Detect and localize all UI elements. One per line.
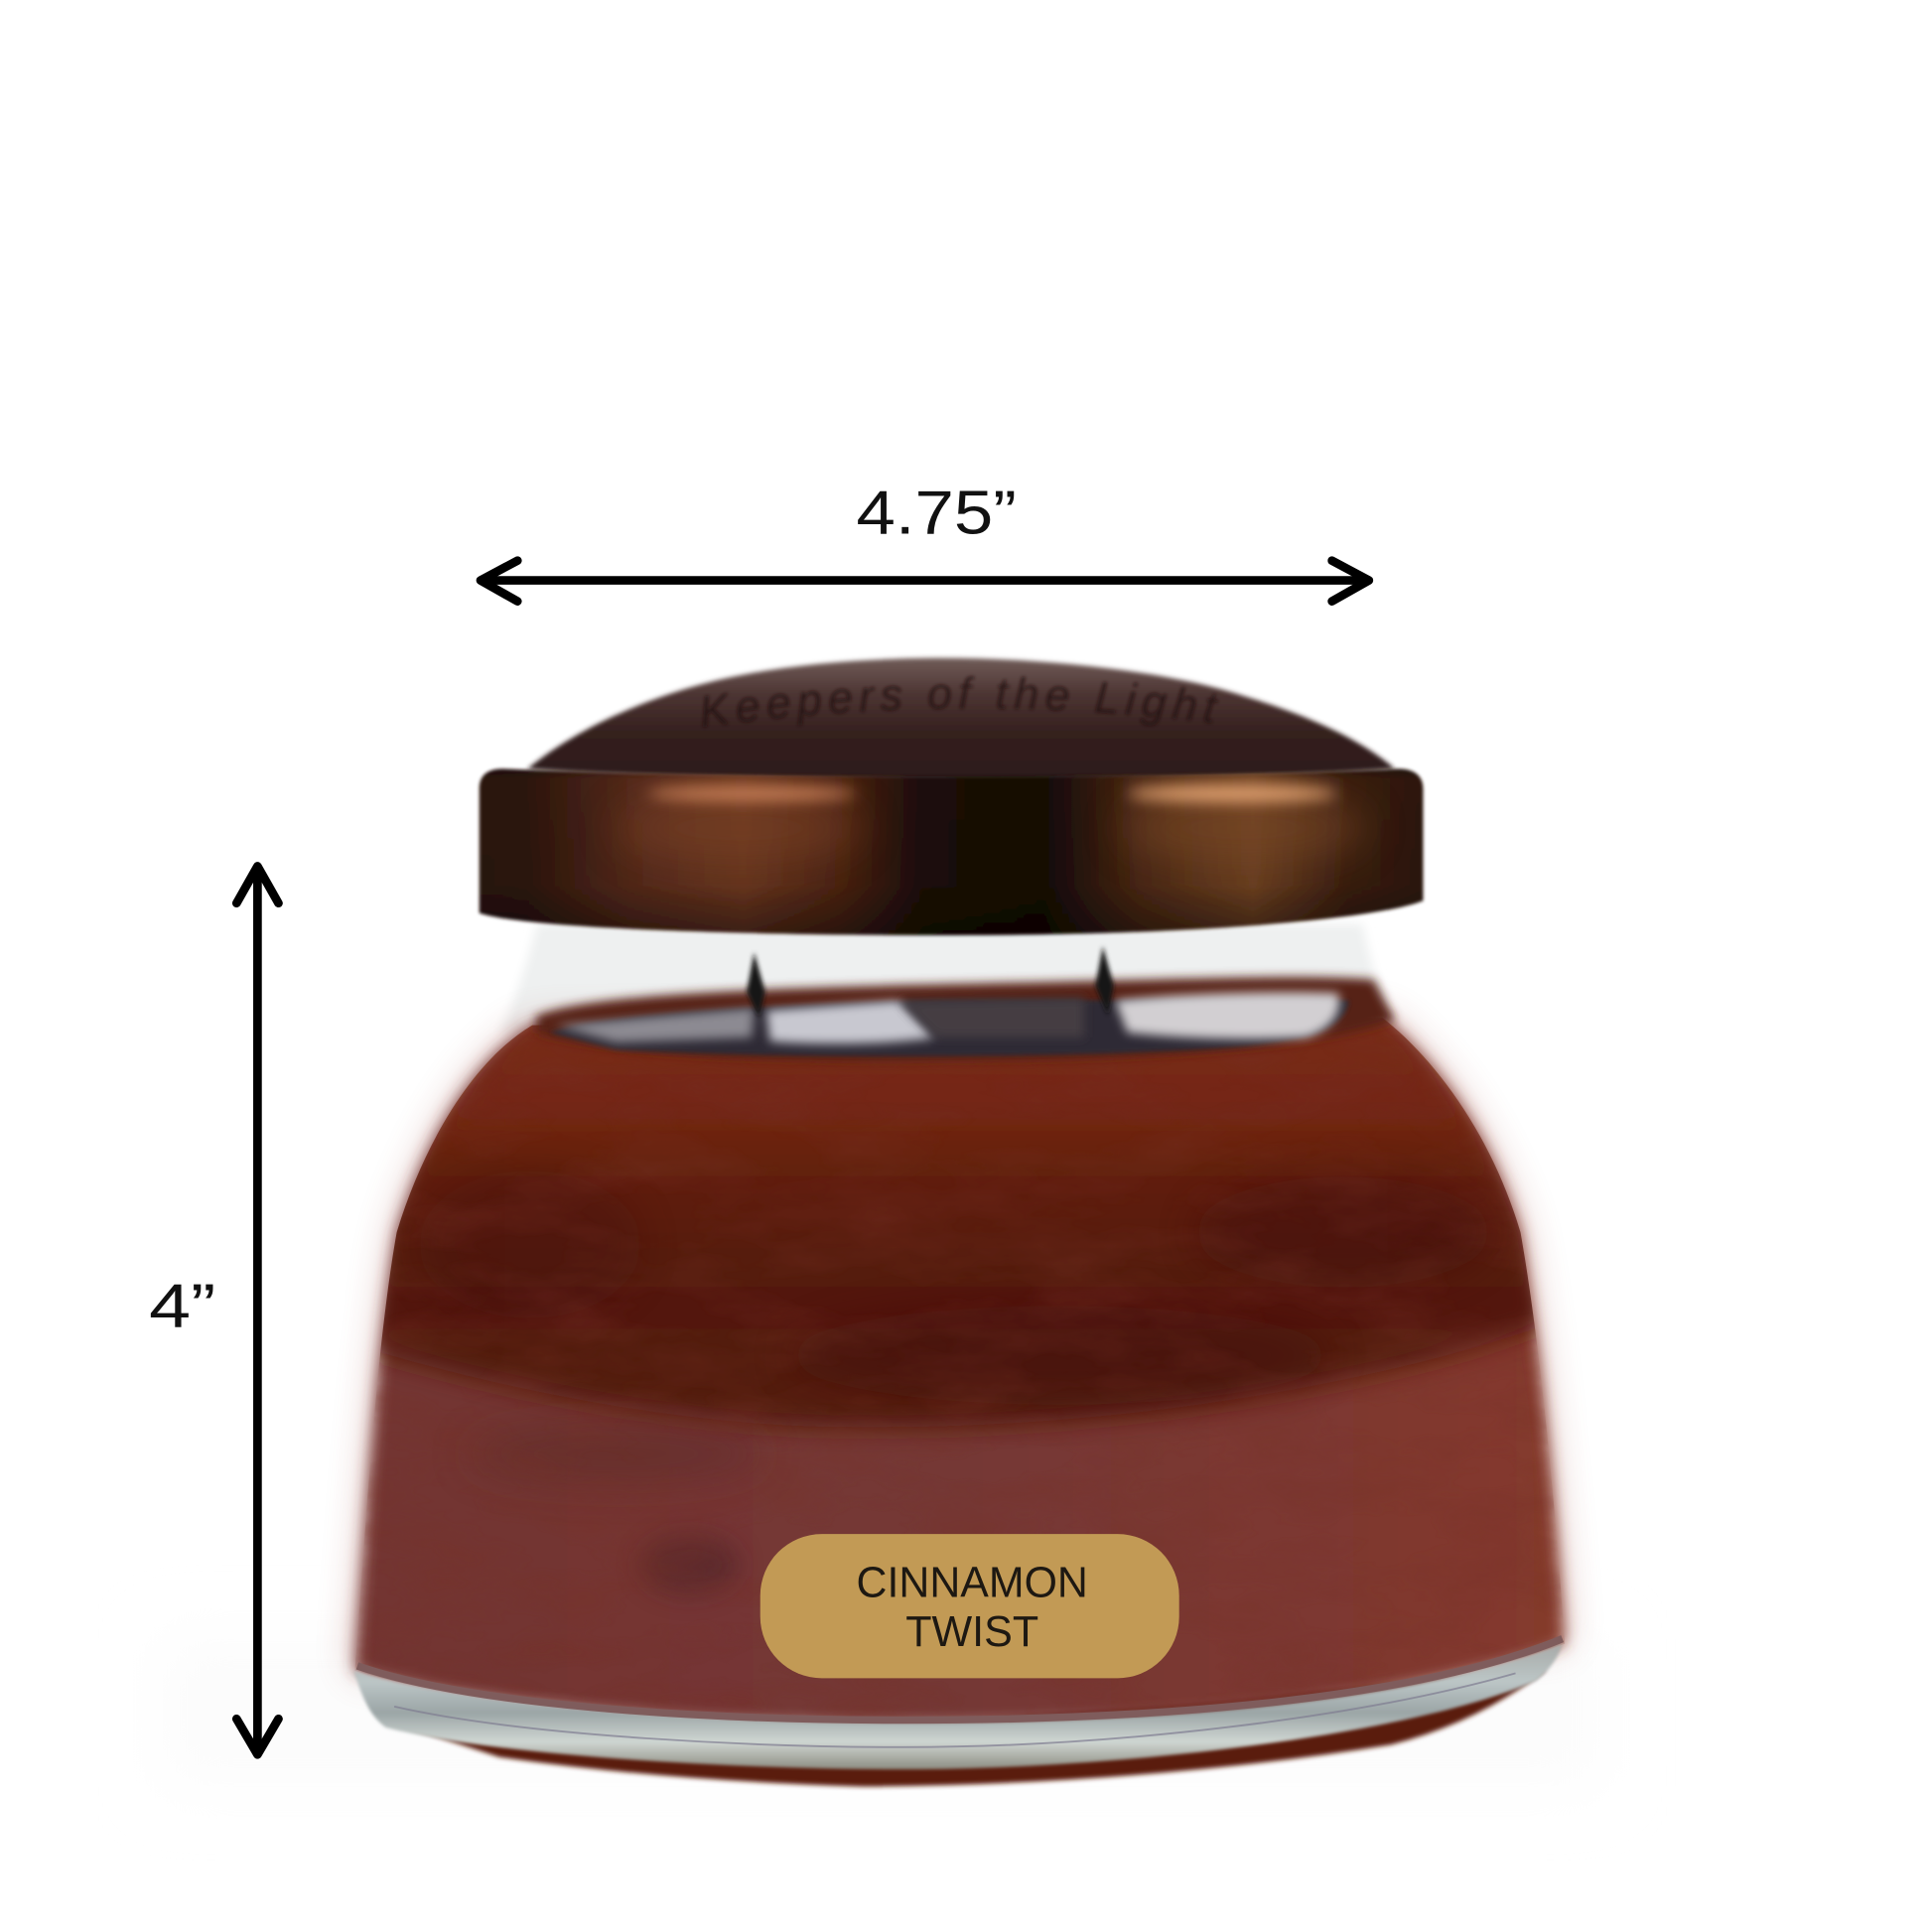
rim highlights: [617, 785, 1368, 865]
height arrow: [236, 866, 278, 1754]
wax mottling: [355, 1143, 1565, 1716]
faint photo halo: [160, 1639, 1601, 1787]
glass base: [353, 1639, 1563, 1769]
glass neck: [499, 924, 1399, 1033]
candle wicks: [747, 946, 1114, 1018]
upper darker wax layer: [369, 1004, 1547, 1427]
candle jar photo: [334, 654, 1587, 1791]
height measurement: 4”: [149, 1273, 215, 1341]
dark wax blotches: [848, 1328, 1272, 1404]
embossed lid lettering: [628, 709, 1294, 740]
width measurement: 4.75”: [857, 479, 1017, 547]
wax top surface: [536, 977, 1395, 1060]
wax body: [345, 1004, 1578, 1725]
label: scent name: CINNAMON: [857, 1559, 1088, 1606]
lid rim: [480, 768, 1423, 935]
lid dome: [526, 654, 1397, 778]
label: scent name: TWIST: [905, 1608, 1038, 1656]
width arrow: [481, 561, 1369, 602]
lid dome: Keepers of the Light: [703, 675, 1219, 727]
wax crescent under the glass: [382, 1670, 1547, 1787]
label: scent name: [760, 1534, 1179, 1678]
wax side glow: [354, 1018, 1565, 1671]
